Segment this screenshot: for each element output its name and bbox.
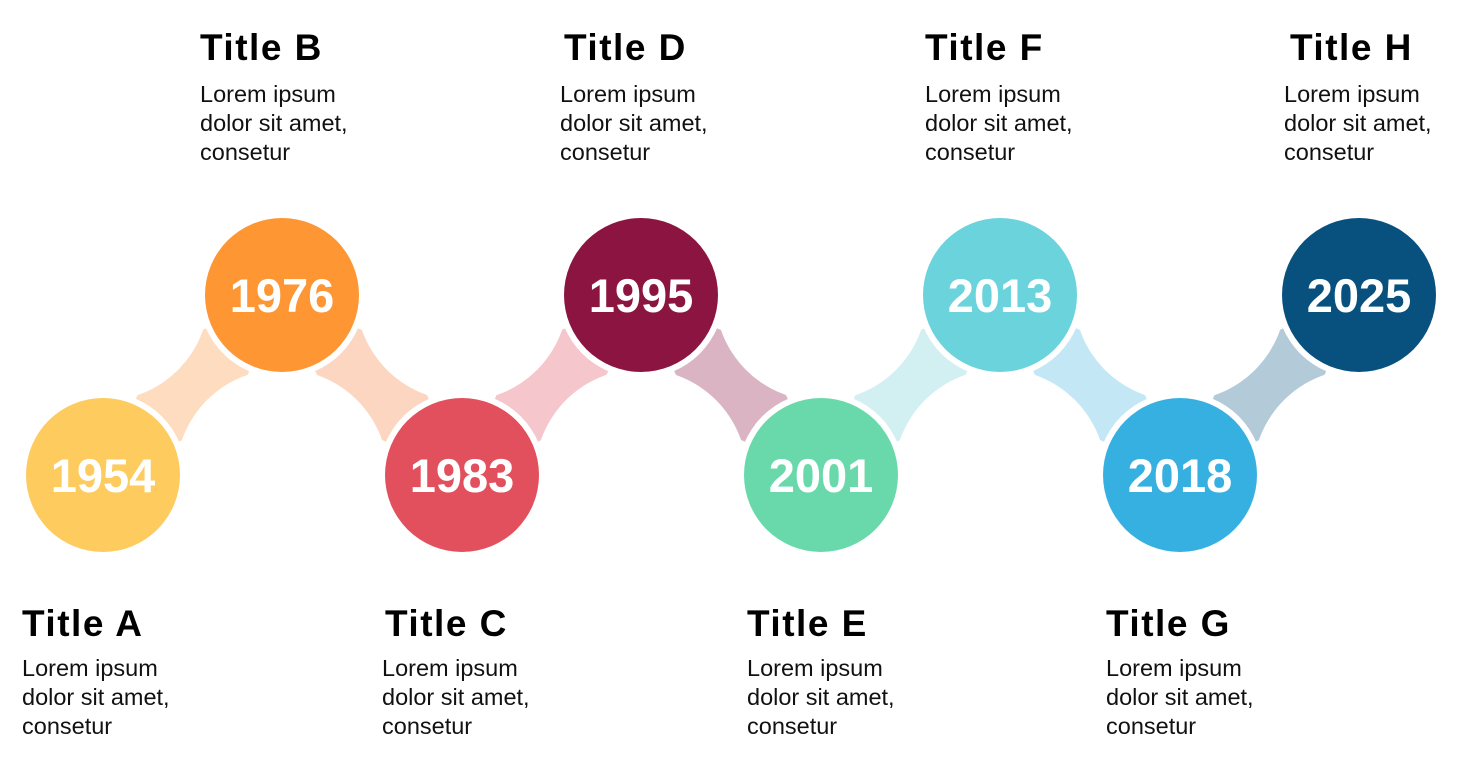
year circles: 1976	[230, 269, 334, 322]
text: Title B: dolor sit amet,	[200, 110, 348, 136]
year circles	[20, 212, 1442, 558]
text: Title H: consetur	[1284, 139, 1374, 165]
text: Title D	[560, 27, 708, 165]
text: Title B: Lorem ipsum	[200, 81, 336, 107]
text: Title A: Lorem ipsum	[22, 655, 158, 681]
text: Title D: Title D	[564, 27, 687, 68]
connectors	[0, 189, 1465, 581]
text: Title F: Lorem ipsum	[925, 81, 1061, 107]
year circles: 1954	[51, 449, 155, 502]
text: Title D: dolor sit amet,	[560, 110, 708, 136]
text: Title E: Title E	[747, 603, 868, 644]
text: Title B: consetur	[200, 139, 290, 165]
text: Title G: consetur	[1106, 713, 1196, 739]
text: Title H: dolor sit amet,	[1284, 110, 1432, 136]
text: Title C: Lorem ipsum	[382, 655, 518, 681]
text: Title C: consetur	[382, 713, 472, 739]
year circles: 2001	[769, 449, 873, 502]
text: Title E: consetur	[747, 713, 837, 739]
year circles: 2013	[948, 269, 1052, 322]
year circles: 2025	[1307, 269, 1411, 322]
text: Title G: dolor sit amet,	[1106, 684, 1254, 710]
text: Title F: dolor sit amet,	[925, 110, 1073, 136]
text: Title G	[1106, 603, 1254, 739]
year circles: 1995	[589, 269, 693, 322]
text: Title A	[22, 603, 170, 739]
text: Title H	[1284, 27, 1432, 165]
year circles: 1983	[410, 449, 514, 502]
text: Title A: dolor sit amet,	[22, 684, 170, 710]
text: Title C: dolor sit amet,	[382, 684, 530, 710]
text: Title F	[925, 27, 1073, 165]
text: Title H: Lorem ipsum	[1284, 81, 1420, 107]
text: Title G: Title G	[1106, 603, 1231, 644]
year circles: 2018	[1128, 449, 1232, 502]
text: Title C: Title C	[385, 603, 508, 644]
text: Title E: dolor sit amet,	[747, 684, 895, 710]
text: Title D: Lorem ipsum	[560, 81, 696, 107]
text: Title A: Title A	[22, 603, 144, 644]
text: Title G: Lorem ipsum	[1106, 655, 1242, 681]
text: Title E: Lorem ipsum	[747, 655, 883, 681]
text: Title E	[747, 603, 895, 739]
text: Title B	[200, 27, 348, 165]
text: Title B: Title B	[200, 27, 323, 68]
text: Title C	[382, 603, 530, 739]
text: Title A: consetur	[22, 713, 112, 739]
text: Title D: consetur	[560, 139, 650, 165]
text: Title F: consetur	[925, 139, 1015, 165]
text: Title H: Title H	[1290, 27, 1413, 68]
text: Title F: Title F	[925, 27, 1044, 68]
